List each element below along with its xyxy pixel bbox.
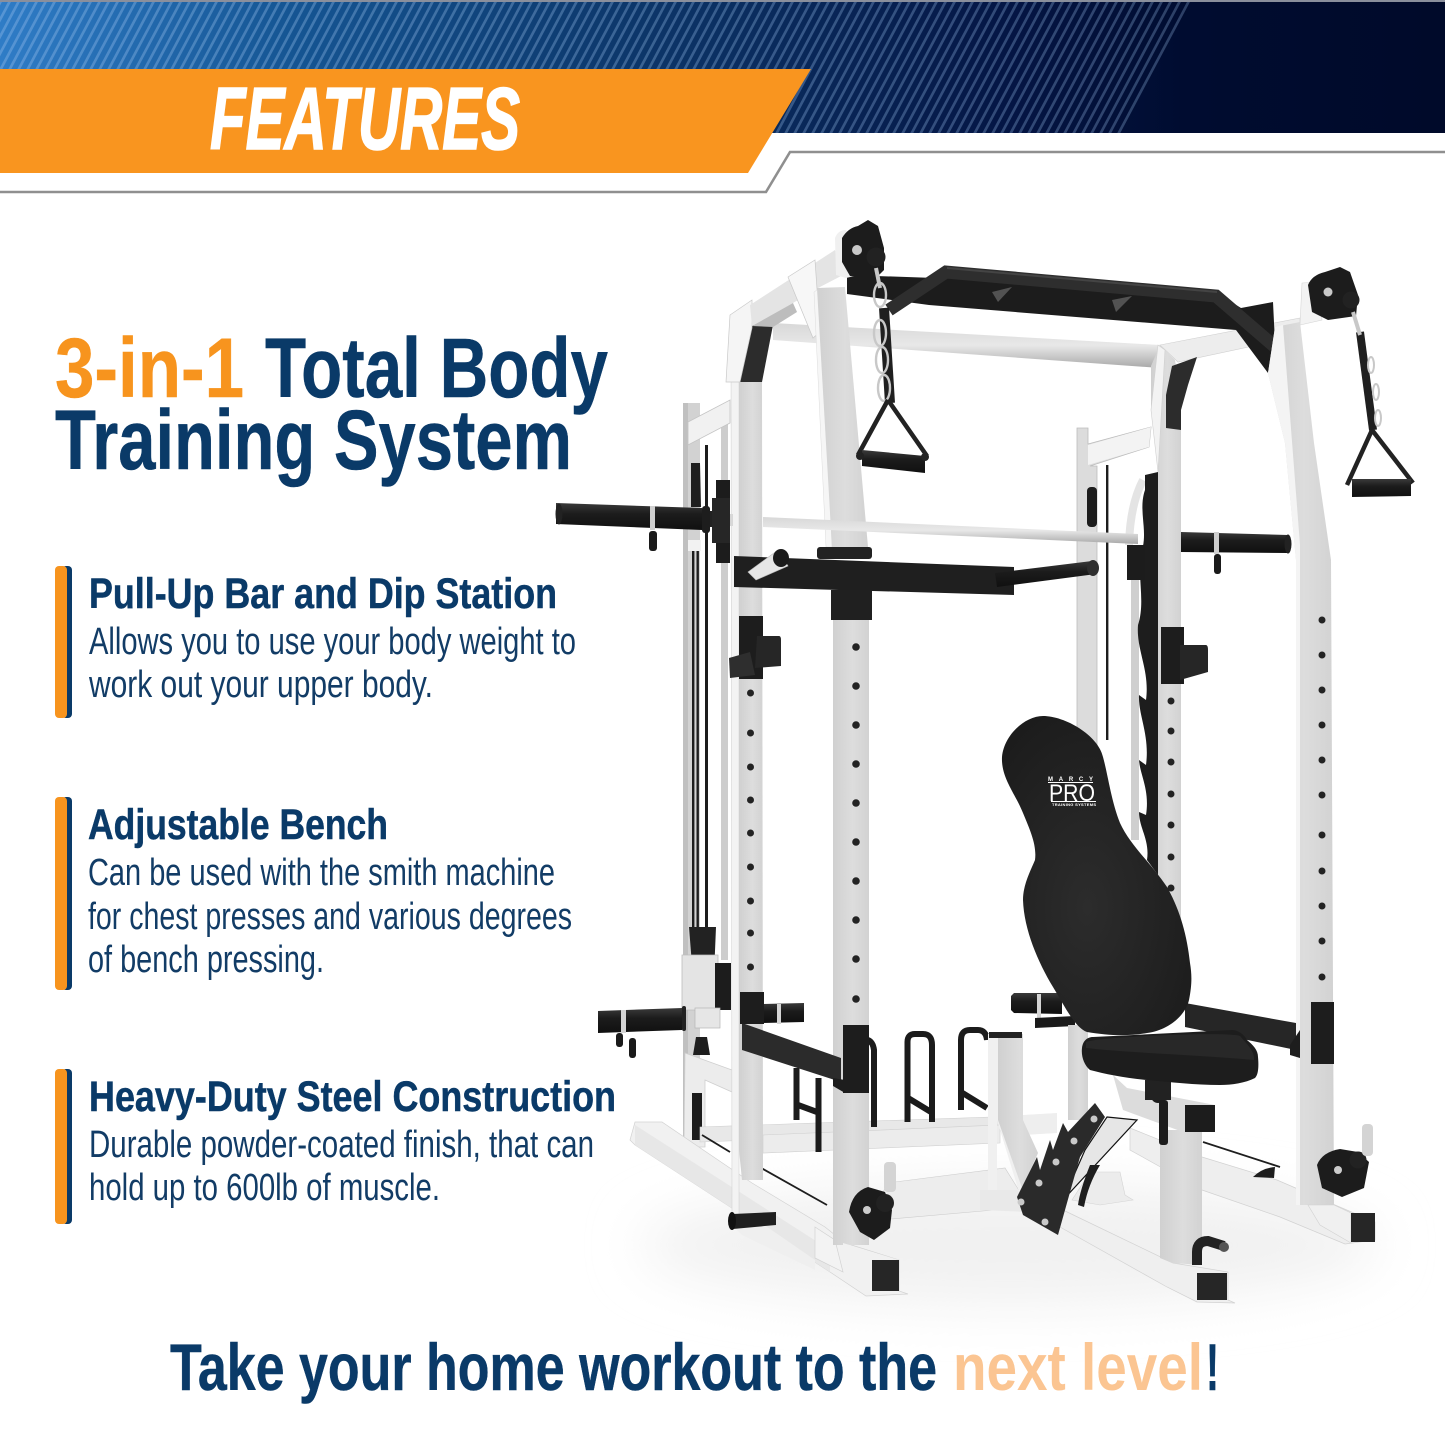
lower right arm and bracket xyxy=(1011,993,1334,1064)
bench adjustment ladder xyxy=(1017,1103,1137,1235)
feature description: of bench pressing. xyxy=(88,939,324,981)
dip station xyxy=(734,547,1099,620)
accent bar xyxy=(55,566,72,718)
front left upright post xyxy=(814,287,899,1291)
bench logo: PRO xyxy=(1049,780,1095,807)
plate storage pegs xyxy=(796,1030,987,1152)
left bar sleeve and carriage xyxy=(556,480,733,563)
heading: 3-in-1 Total Body Training System: Total Body xyxy=(265,321,608,415)
feature description: Can be used with the smith machine xyxy=(88,852,555,894)
rear left upright post xyxy=(726,300,843,1272)
feature: Heavy-Duty Steel Construction xyxy=(55,1069,616,1224)
left cable handle with chain xyxy=(856,268,929,473)
header white step with grey rule xyxy=(0,133,1445,192)
feature description: for chest presses and various degrees xyxy=(88,896,572,938)
header banner: blue striped band xyxy=(0,0,1445,133)
bottom left pulley xyxy=(849,1162,896,1240)
weight ladder xyxy=(1138,472,1158,875)
lower left sleeves and arm xyxy=(598,992,869,1093)
accent bar xyxy=(55,1069,72,1224)
top left corner beam with plates xyxy=(750,250,843,338)
feature description xyxy=(88,621,576,706)
feature heading: Heavy-Duty Steel Construction xyxy=(89,1073,616,1121)
rear right upright post xyxy=(1151,345,1197,1000)
footer tagline: ! xyxy=(1206,1330,1219,1404)
top left pulley xyxy=(835,220,886,278)
floor shadow xyxy=(640,1185,1380,1305)
bench backrest pad xyxy=(1002,716,1191,1035)
bench support post xyxy=(1068,1025,1215,1265)
front left upright holes xyxy=(852,643,860,1003)
floor foot caps xyxy=(872,1260,1227,1300)
floor handle xyxy=(728,1212,776,1230)
rear top crossbeam xyxy=(773,323,1160,368)
accent bar xyxy=(55,797,72,990)
orange title ribbon xyxy=(0,69,811,173)
right cable handle with chain xyxy=(1347,312,1413,497)
feature description: work out your upper body. xyxy=(88,664,433,706)
feature description xyxy=(88,852,572,981)
left cable tower xyxy=(682,400,732,1148)
footer tagline: Take your home workout to the xyxy=(170,1330,937,1404)
feature description: Durable powder-coated finish, that can xyxy=(89,1124,594,1166)
bench logo: TRAINING SYSTEMS xyxy=(1052,802,1096,807)
feature description xyxy=(89,1124,594,1209)
heading: 3-in-1 Total Body Training System xyxy=(55,321,608,487)
feature description: hold up to 600lb of muscle. xyxy=(89,1167,440,1209)
top right pulley xyxy=(1308,267,1360,320)
right bar sleeve xyxy=(1127,532,1292,580)
heading: 3-in-1 Total Body Training System: 3-in-1 xyxy=(55,321,244,415)
pull-up bar xyxy=(847,268,1275,373)
product: smith machine power rack with bench xyxy=(556,220,1413,1305)
bottom right pulley xyxy=(1317,1124,1373,1197)
right J-hook xyxy=(1161,627,1208,684)
front right upright post xyxy=(1268,282,1375,1243)
feature heading: Adjustable Bench xyxy=(88,801,388,849)
right cable tower xyxy=(1077,427,1151,840)
floor frame rails and crossbars xyxy=(630,1113,1375,1303)
title: FEATURES: FEATURES xyxy=(210,69,520,168)
bench seat xyxy=(1082,1030,1258,1085)
feature heading: Pull-Up Bar and Dip Station xyxy=(89,570,557,618)
footer tagline: next level xyxy=(953,1330,1203,1404)
heading: 3-in-1 Total Body Training System: Training System xyxy=(55,393,572,487)
left J-hook xyxy=(729,616,781,679)
rear left upright holes xyxy=(747,690,754,970)
bench peg xyxy=(1197,1241,1229,1265)
center storage post xyxy=(980,1032,1038,1212)
right top side beam xyxy=(1160,318,1300,362)
feature description: Allows you to use your body weight to xyxy=(89,621,576,663)
feature: Pull-Up Bar and Dip Station xyxy=(55,566,576,718)
bench logo: MARCY xyxy=(1048,777,1093,783)
feature: Adjustable Bench xyxy=(55,797,572,990)
smith machine bar xyxy=(763,517,1138,544)
